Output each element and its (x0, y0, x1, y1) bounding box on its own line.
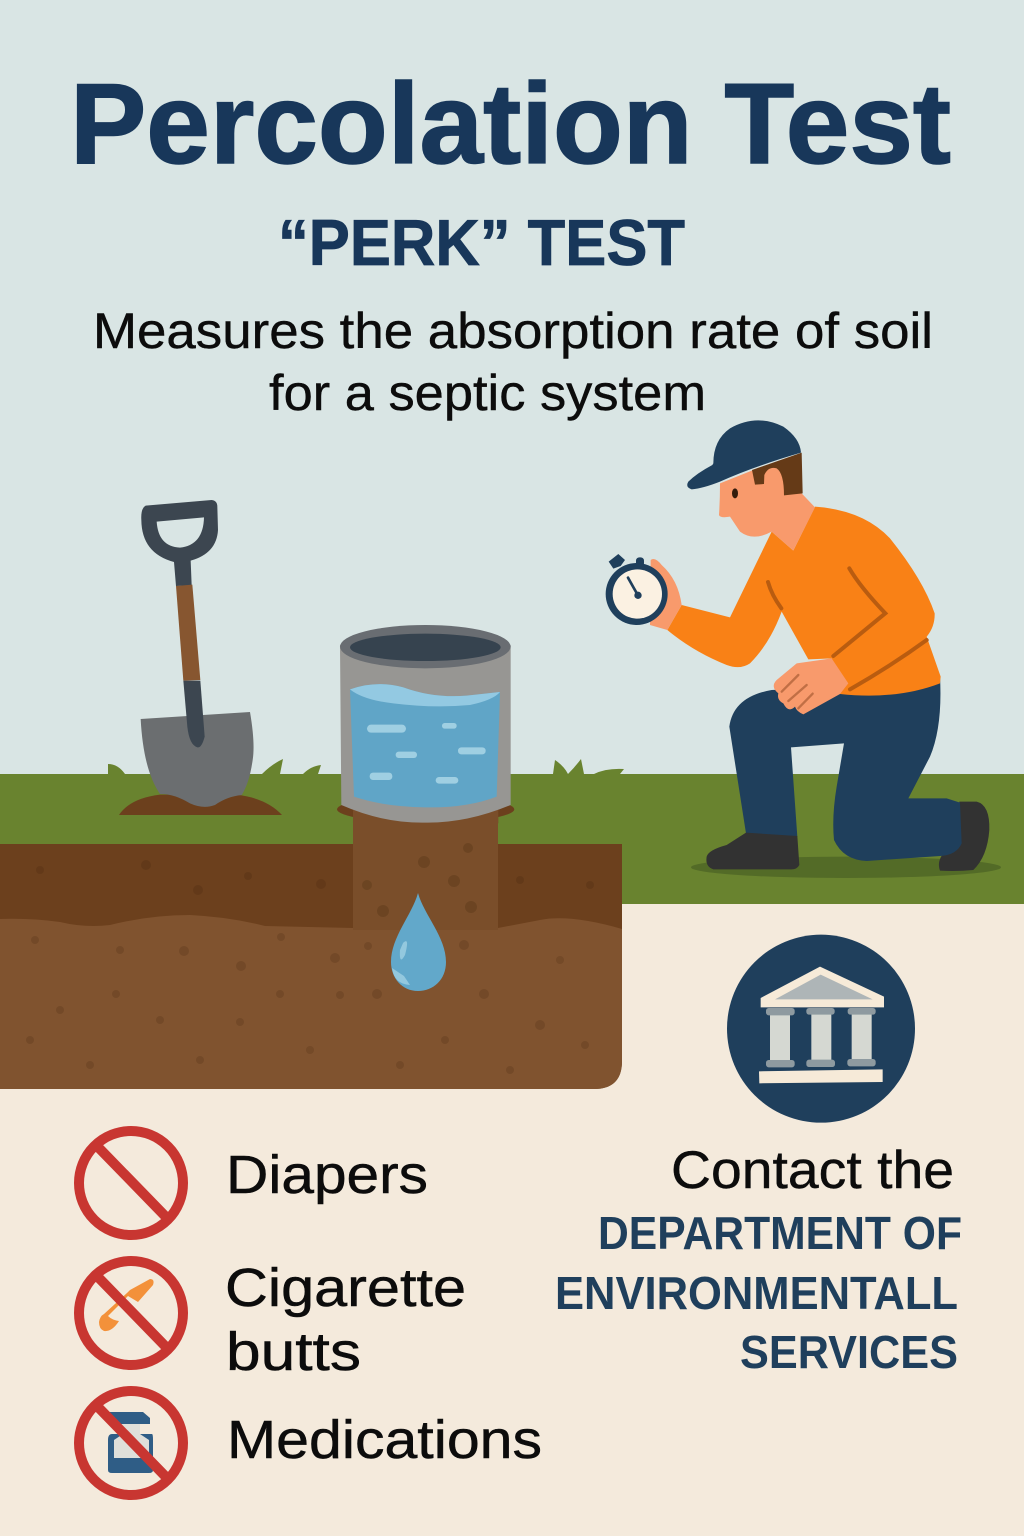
contact text (555, 1141, 962, 1378)
icon: medicine bottle (107, 1412, 153, 1473)
trousers (729, 677, 962, 861)
contact text: DEPARTMENT OF (598, 1207, 962, 1259)
shovel (119, 500, 282, 815)
cream lower background (0, 900, 1024, 1536)
bucket rim (340, 625, 511, 668)
contact text: ENVIRONMENTALL (555, 1267, 958, 1319)
bucket base dirt ring (337, 796, 514, 823)
icon: prohibition sign (79, 1261, 183, 1365)
icon: prohibition sign (79, 1391, 183, 1495)
columns (770, 1013, 872, 1062)
contact text: SERVICES (740, 1326, 958, 1378)
holding hand (650, 559, 682, 630)
base (759, 1069, 883, 1083)
back shoe (939, 802, 989, 871)
water ripples (367, 723, 486, 784)
pediment (761, 967, 884, 1007)
contact text: Contact the (671, 1141, 954, 1200)
description (93, 303, 933, 421)
soil cross-section (0, 844, 622, 1089)
water surface (350, 684, 500, 706)
label: Medications (227, 1410, 542, 1470)
head and neck (719, 460, 815, 551)
prohibited item: medications (79, 1391, 542, 1495)
resting hand (774, 658, 848, 714)
sweater fold lines (768, 568, 927, 689)
shovel blade (141, 712, 254, 807)
stopwatch (606, 554, 668, 625)
subtitle: “PERK” TEST (278, 206, 685, 279)
bucket of water (337, 625, 514, 823)
title: Percolation Test (70, 61, 951, 188)
front shoe (706, 833, 799, 869)
test hole shaft (353, 815, 498, 930)
bucket body (340, 645, 511, 823)
icon: cigarette (99, 1279, 154, 1331)
ground shadow (691, 857, 1001, 878)
eye (732, 488, 738, 498)
description: Measures the absorption rate of soil (93, 303, 933, 359)
prohibited item: cigarette butts (79, 1258, 466, 1382)
water drop (391, 893, 446, 991)
shovel handle grip (141, 500, 218, 586)
label: Diapers (226, 1145, 428, 1205)
description: for a septic system (269, 365, 706, 421)
label (225, 1258, 466, 1382)
icon: prohibition sign (79, 1131, 183, 1235)
soil mound (119, 795, 282, 815)
water (350, 684, 500, 807)
sweater (667, 507, 941, 696)
sky background (0, 0, 1024, 780)
label: butts (226, 1322, 361, 1382)
grass ground (0, 759, 1024, 904)
cap (687, 420, 801, 489)
soil speckles (36, 860, 594, 895)
icon: government building (727, 935, 915, 1123)
prohibited item: diapers (79, 1131, 428, 1235)
hair (752, 453, 803, 495)
shovel wooden shaft (176, 585, 200, 681)
shovel lower socket (183, 681, 205, 747)
label: Cigarette (225, 1258, 466, 1318)
person with stopwatch (606, 420, 1001, 878)
